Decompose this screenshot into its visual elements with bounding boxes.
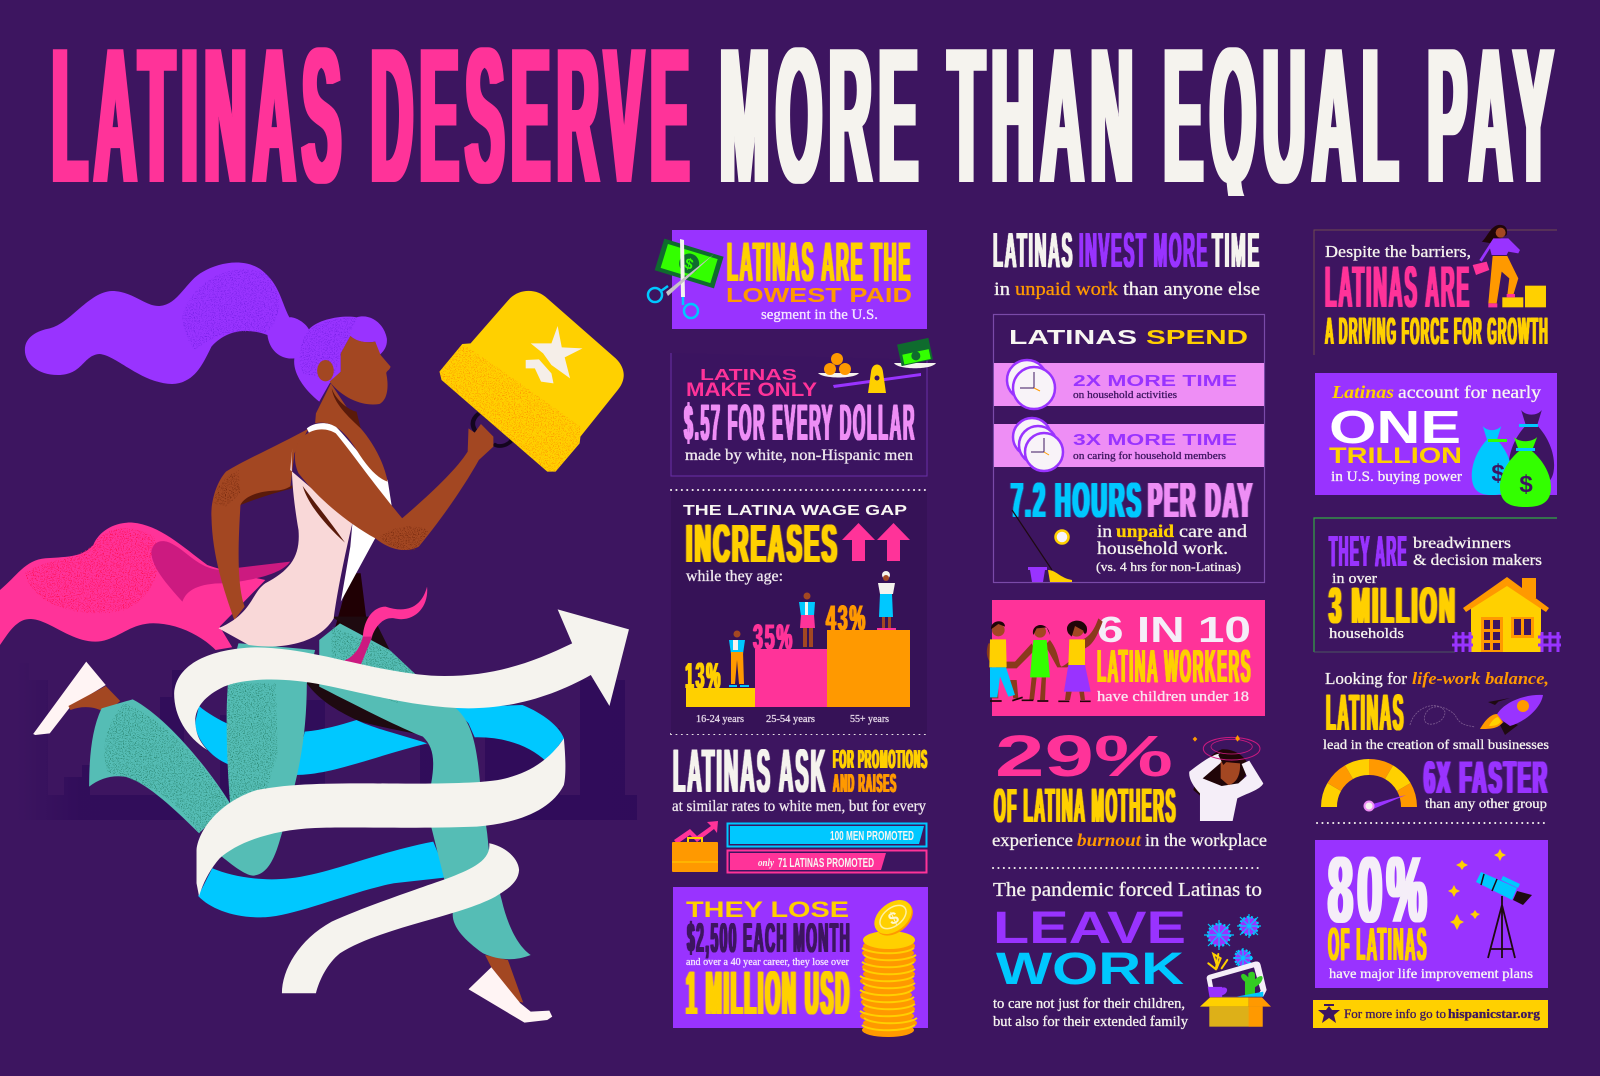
column 1: $2,500 EACH MONTH bbox=[687, 914, 851, 961]
heading: 29%: 29% bbox=[995, 724, 1173, 789]
legs, shoes and cyan ribbon bbox=[33, 617, 564, 1023]
icon: rocket bbox=[1410, 695, 1543, 735]
text: account for: Latinas bbox=[1331, 382, 1394, 402]
text: unpaid work bbox=[994, 279, 1260, 300]
divider dots bbox=[1317, 822, 1548, 824]
panel: breadwinners bbox=[1314, 518, 1561, 652]
icon: two clocks bbox=[1007, 360, 1055, 409]
white ribbon with arrow bbox=[174, 609, 629, 993]
text: comparison: made by white, non-Hispanic men bbox=[685, 447, 913, 464]
figure: older woman bbox=[877, 571, 896, 630]
panel: 80 percent bbox=[1315, 837, 1548, 988]
column 1 bbox=[648, 230, 936, 1037]
torso and tank top bbox=[218, 423, 392, 647]
yellow bag with star bbox=[439, 291, 624, 472]
text: breadwinners bbox=[1332, 535, 1542, 587]
text: burnout: experience bbox=[992, 830, 1073, 850]
band: 2x more time bbox=[994, 363, 1264, 406]
text: 1 MILLION USD bbox=[686, 959, 851, 1027]
back arm bbox=[211, 428, 369, 640]
trouser shading bbox=[105, 627, 415, 833]
icon: three clocks bbox=[1013, 418, 1063, 471]
icon: burned out woman bbox=[1189, 735, 1263, 821]
panel: latinas spend: 7.2 HOURS bbox=[1011, 474, 1143, 528]
bar: men promoted bbox=[728, 824, 926, 846]
text: PER DAY bbox=[1148, 474, 1254, 528]
left shoe bbox=[33, 662, 106, 735]
divider dots bbox=[993, 867, 1260, 869]
panel: one trillion bbox=[1315, 373, 1557, 507]
heading: invest more time: LATINAS bbox=[993, 224, 1074, 278]
panel: small businesses bbox=[1321, 669, 1549, 812]
text: OF LATINA MOTHERS bbox=[994, 780, 1177, 833]
heading: 6 in 10: 6 IN 10 bbox=[1097, 609, 1251, 650]
heading: latinas spend: LATINAS bbox=[1009, 327, 1137, 349]
bar chart: 55+ years bbox=[850, 713, 889, 725]
text: unpaid care: household work. bbox=[1097, 538, 1228, 558]
icon: stars bbox=[1448, 849, 1506, 930]
text: unpaid work: in bbox=[994, 279, 1011, 300]
band: 2x more time: on household activities bbox=[1073, 389, 1177, 401]
panel: latinas ask bbox=[672, 737, 928, 872]
band: 2x more time: 2X MORE TIME bbox=[1073, 373, 1237, 390]
text: breadwinners: & decision makers bbox=[1413, 552, 1542, 569]
text: breadwinners: in over bbox=[1332, 571, 1377, 587]
text: website: For more info go to bbox=[1344, 1006, 1446, 1021]
heading: trillion: TRILLION bbox=[1329, 443, 1462, 468]
heading: wage gap: THE LATINA WAGE GAP bbox=[683, 502, 907, 519]
figure: adult woman bbox=[799, 592, 815, 647]
text: $.57 FOR EVERY DOLLAR bbox=[684, 394, 916, 451]
icon: telescope bbox=[1476, 872, 1532, 958]
panel: latinas spend bbox=[994, 314, 1264, 582]
icon: moving box bbox=[1200, 954, 1271, 1027]
bar chart: 25-54 years bbox=[766, 713, 815, 725]
text: extended family: to care not just for their children, bbox=[993, 996, 1185, 1012]
icon: three children bbox=[987, 618, 1103, 701]
panel: pay gap bbox=[671, 338, 936, 476]
icon: money bags: $ bbox=[1519, 471, 1533, 498]
bar chart: 43% bbox=[826, 599, 867, 638]
teal trousers bbox=[89, 623, 531, 959]
text: looking for: life-work balance, bbox=[1412, 669, 1549, 688]
bar chart: 35% bbox=[753, 618, 794, 657]
bar: latinas promoted bbox=[728, 850, 926, 872]
text: extended family: but also for their extended family bbox=[993, 1014, 1188, 1030]
text: unpaid care: in bbox=[1097, 521, 1112, 541]
cyan ribbon bbox=[195, 705, 564, 917]
right foot and shoe bbox=[485, 955, 523, 1003]
icon: up arrows bbox=[842, 523, 910, 561]
text: LATINA WORKERS bbox=[1097, 640, 1252, 692]
panel: pay gap: MAKE ONLY bbox=[686, 380, 817, 401]
panel: wage gap chart bbox=[671, 491, 927, 734]
text: account for bbox=[1331, 382, 1541, 402]
text: unpaid care: care and bbox=[1179, 521, 1247, 541]
text: looking for: Looking for bbox=[1325, 669, 1407, 688]
icon: scissors cutting money bbox=[648, 239, 724, 318]
icon: star logo bbox=[1318, 1004, 1340, 1023]
text: unpaid care: (vs. 4 hrs for non-Latinas) bbox=[1096, 559, 1241, 574]
city skyline bbox=[17, 663, 637, 820]
bar chart: 13% bbox=[685, 655, 722, 696]
panel: latinas ask: LATINAS ASK bbox=[673, 737, 827, 805]
bar chart bbox=[685, 599, 910, 725]
panel: latinas ask: AND RAISES bbox=[833, 768, 897, 798]
icon: viruses bbox=[1204, 914, 1261, 968]
panel: 6 in 10 bbox=[987, 600, 1265, 716]
text: children: have children under 18 bbox=[1097, 689, 1249, 705]
heading: lowest paid: LOWEST PAID bbox=[726, 285, 912, 307]
illustration: running woman with ribbon bbox=[0, 262, 637, 1023]
text: pandemic: The pandemic forced Latinas to bbox=[993, 879, 1262, 901]
front arm with hand bbox=[295, 413, 512, 550]
text: any other group: than any other group bbox=[1425, 797, 1547, 812]
divider dots bbox=[671, 490, 927, 734]
text: INVEST MORE bbox=[1079, 224, 1209, 278]
text: account for: account for nearly bbox=[1398, 382, 1541, 402]
text: breadwinners: breadwinners bbox=[1413, 535, 1511, 552]
panel: lowest paid bbox=[648, 230, 927, 329]
text: while they age: while they age: bbox=[686, 568, 783, 585]
text: improvement plans: have major life improvement plans bbox=[1329, 967, 1533, 982]
bar: men promoted: 100 MEN PROMOTED bbox=[830, 828, 914, 843]
panel: small businesses: LATINAS bbox=[1326, 684, 1405, 741]
text: burnout bbox=[992, 830, 1267, 850]
text: TIME bbox=[1212, 224, 1261, 278]
band: 3x more time bbox=[994, 424, 1264, 467]
heading: work: WORK bbox=[996, 943, 1185, 994]
panel: they lose bbox=[673, 887, 928, 1037]
text: buying power: in U.S. buying power bbox=[1331, 469, 1462, 485]
chart: speed gauge bbox=[1321, 759, 1417, 810]
text: households: households bbox=[1329, 626, 1404, 642]
scarf bbox=[0, 523, 290, 650]
panel: leave work bbox=[993, 879, 1271, 1030]
title bbox=[52, 47, 1555, 196]
text: similar rates: at similar rates to white men, but for every bbox=[672, 798, 926, 815]
heading: latinas make only: LATINAS bbox=[700, 367, 797, 384]
bar: latinas promoted: 71 LATINAS PROMOTED bbox=[778, 855, 874, 870]
text: website bbox=[1344, 1006, 1541, 1021]
icon: balance scale bbox=[818, 338, 936, 393]
dark under-leg bbox=[307, 617, 423, 735]
icon: briefcase with arrow bbox=[672, 821, 718, 872]
heading: leave: LEAVE bbox=[993, 902, 1186, 953]
head and neck bbox=[315, 336, 391, 482]
text: website: hispanicstar.org bbox=[1448, 1006, 1541, 1021]
icon: coin stack bbox=[860, 893, 919, 1037]
icon: woman climbing steps bbox=[1473, 225, 1546, 307]
text: career: and over a 40 year career, they lose over bbox=[686, 956, 849, 968]
text: unpaid care: unpaid bbox=[1116, 521, 1174, 541]
heading: one: ONE bbox=[1329, 401, 1461, 453]
icon: money bags bbox=[1472, 410, 1554, 507]
band: 3x more time: on caring for household members bbox=[1073, 450, 1226, 462]
text: LATINAS ARE THE bbox=[727, 230, 912, 293]
icon: mop and bucket bbox=[1012, 510, 1072, 582]
icon: scissors cutting money: $ bbox=[682, 255, 696, 274]
panel: 29 percent bbox=[992, 724, 1267, 850]
column 3 bbox=[1313, 225, 1561, 1028]
bar: latinas promoted: only bbox=[758, 858, 775, 869]
panel: driving force bbox=[1314, 225, 1557, 355]
text: burnout: burnout bbox=[1077, 830, 1142, 850]
text: despite: Despite the barriers, bbox=[1325, 242, 1471, 261]
column 2 bbox=[987, 224, 1271, 1030]
icon: coin stack: $ bbox=[885, 908, 902, 929]
panel: breadwinners: THEY ARE bbox=[1329, 527, 1408, 576]
heading: they lose: THEY LOSE bbox=[686, 897, 849, 922]
text: lead in creation: lead in the creation of small businesses bbox=[1323, 738, 1549, 753]
text: segment: segment in the U.S. bbox=[761, 307, 878, 323]
figure: young woman bbox=[729, 630, 749, 687]
icon: money bags: $ bbox=[1491, 460, 1505, 487]
text: extended family bbox=[993, 996, 1188, 1030]
text: unpaid work: than anyone else bbox=[1123, 279, 1260, 300]
panel: wage gap chart: INCREASES bbox=[686, 514, 839, 574]
text: unpaid care bbox=[1096, 521, 1247, 574]
small pink ribbon tail bbox=[344, 587, 427, 665]
purple hair bbox=[25, 262, 387, 402]
text: unpaid work: unpaid work bbox=[1015, 279, 1119, 300]
icon: house bbox=[1452, 577, 1561, 652]
bar chart: 16-24 years bbox=[696, 713, 744, 725]
text: looking for bbox=[1325, 669, 1549, 688]
panel: latinas spend: SPEND bbox=[1146, 327, 1248, 349]
panel: 80 percent: 80% bbox=[1328, 837, 1431, 942]
text: FOR PROMOTIONS bbox=[833, 744, 928, 774]
text: burnout: in the workplace bbox=[1145, 830, 1267, 850]
band: 3x more time: 3X MORE TIME bbox=[1073, 432, 1237, 449]
callout: more info bbox=[1313, 1000, 1548, 1028]
